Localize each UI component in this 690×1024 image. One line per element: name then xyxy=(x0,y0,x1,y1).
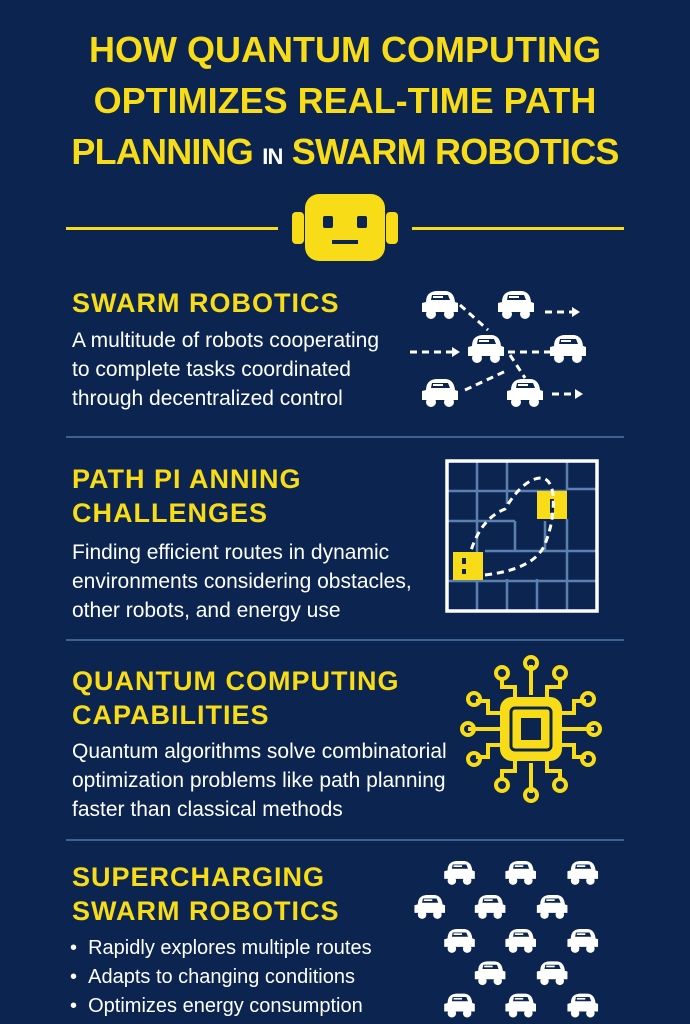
heading: supercharging: SWARM ROBOTICS xyxy=(72,896,340,926)
text: quantum: optimization problems like path planning xyxy=(72,769,446,792)
heading: supercharging xyxy=(72,862,340,926)
heading: quantum computing capabilities: CAPABILITIES xyxy=(72,700,270,730)
heading: path planning challenges xyxy=(72,464,302,528)
icon: robot head with lines xyxy=(66,194,624,261)
heading: quantum computing capabilities: QUANTUM COMPUTING xyxy=(72,666,399,696)
heading: swarm robotics: SWARM ROBOTICS xyxy=(72,288,340,318)
heading: path planning challenges: CHALLENGES xyxy=(72,498,268,528)
text: quantum: Quantum algorithms solve combinatorial xyxy=(72,740,447,763)
text: swarm robotics: through decentralized control xyxy=(72,387,343,410)
text: path planning: other robots, and energy use xyxy=(72,599,341,622)
icon: quantum chip xyxy=(460,655,602,803)
heading: path planning challenges: PATH PI ANNING xyxy=(72,464,302,494)
text: path planning xyxy=(72,541,412,622)
text: swarm robotics xyxy=(72,329,379,410)
icon: car swarm xyxy=(414,861,598,1018)
list: benefits xyxy=(70,937,372,1017)
title: OPTIMIZES REAL-TIME PATH xyxy=(94,80,596,121)
list: benefits: • Optimizes energy consumption xyxy=(70,995,363,1017)
title: PLANNING IN SWARM ROBOTICS xyxy=(71,131,619,172)
heading: quantum computing capabilities xyxy=(72,666,399,730)
text: swarm robotics: A multitude of robots cooperating xyxy=(72,329,379,352)
text: path planning: environments considering obstacles, xyxy=(72,570,412,593)
text: path planning: Finding efficient routes in dynamic xyxy=(72,541,389,564)
list: benefits: • Adapts to changing conditions xyxy=(70,966,355,988)
title: HOW QUANTUM COMPUTING xyxy=(89,29,601,70)
heading: supercharging: SUPERCHARGING xyxy=(72,862,325,892)
text: quantum: faster than classical methods xyxy=(72,798,343,821)
title xyxy=(71,29,619,172)
icon: swarm cars xyxy=(410,291,586,407)
icon: grid maze xyxy=(445,459,599,613)
list: benefits: • Rapidly explores multiple routes xyxy=(70,937,372,959)
text: quantum xyxy=(72,740,447,821)
text: swarm robotics: to complete tasks coordinated xyxy=(72,358,351,381)
